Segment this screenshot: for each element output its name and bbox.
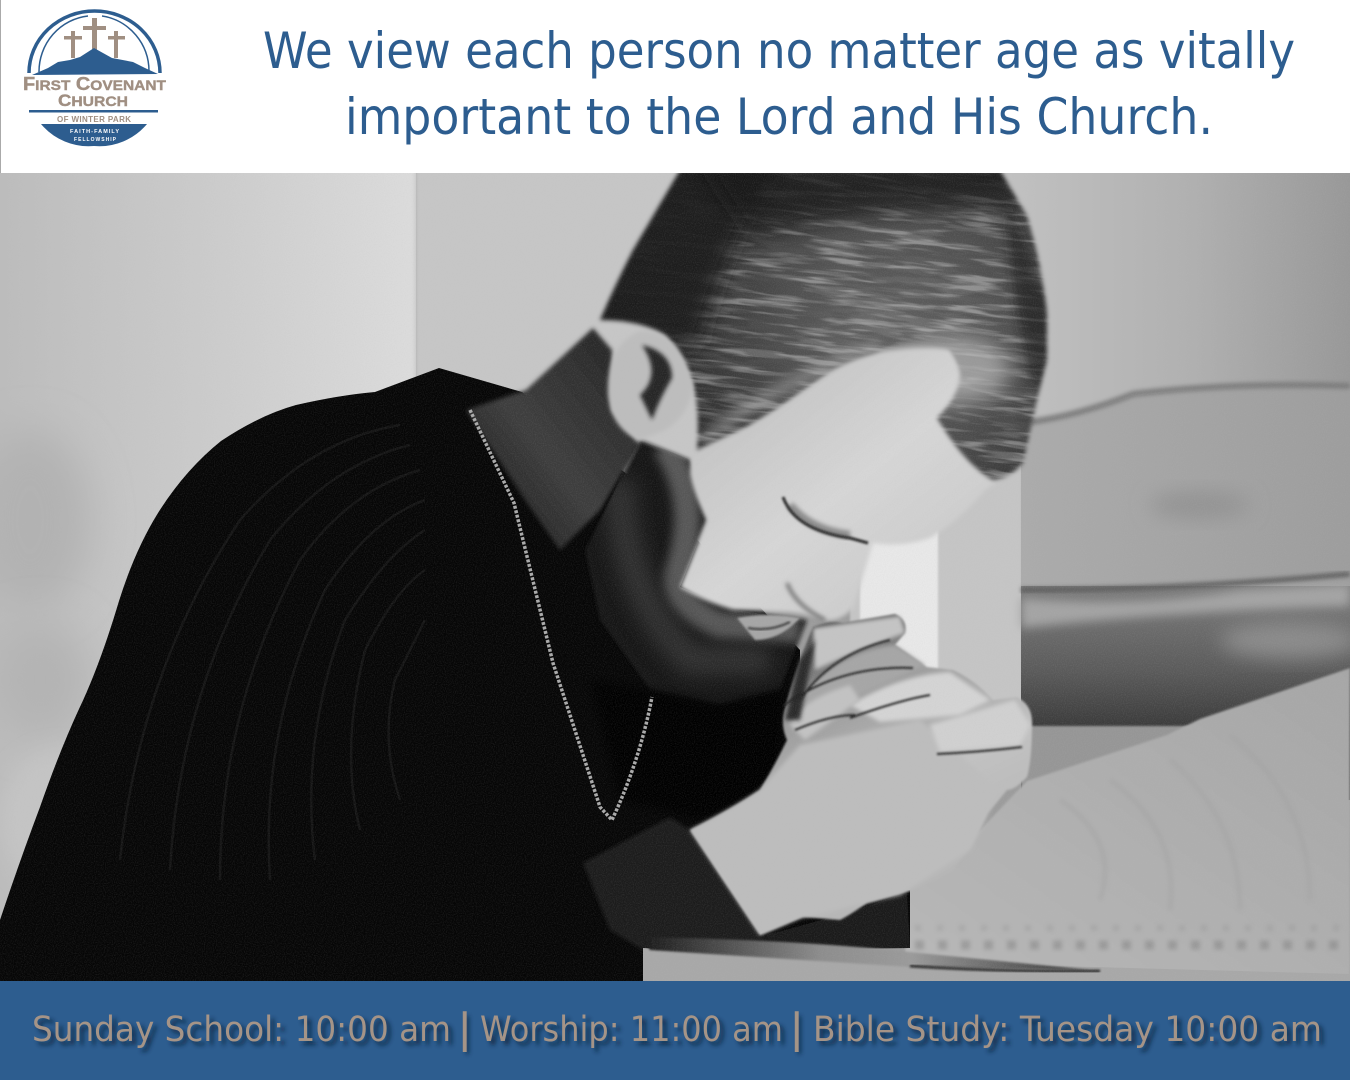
service times: | (790, 1006, 803, 1052)
text shadow (36, 1014, 1326, 1054)
logo subtitle: OF WINTER PARK (57, 115, 131, 124)
beard (587, 438, 810, 702)
service times: Bible Study: Tuesday 10:00 am (813, 1010, 1322, 1050)
logo motto: FAITH-FAMILY (70, 129, 119, 135)
necklace (470, 410, 652, 820)
praying hands (690, 614, 1032, 935)
fingers (802, 644, 925, 706)
text shadow: Worship: 11:00 am (484, 1014, 787, 1054)
wall panel and window (849, 464, 1021, 700)
logo: First Covenant Church: FELLOWSHIP (74, 137, 117, 143)
text shadow: Sunday School: 10:00 am (36, 1014, 455, 1054)
icon: three crosses (64, 18, 125, 58)
footer band (0, 981, 1350, 1080)
sleeve (584, 818, 766, 950)
header background (0, 0, 1350, 173)
wall, middle (414, 173, 700, 472)
service times (32, 1006, 1326, 1054)
service times: Sunday School: 10:00 am (32, 1010, 451, 1050)
face (680, 348, 1022, 620)
ear (608, 331, 693, 440)
icon: mountain (32, 48, 158, 75)
text shadow: Bible Study: Tuesday 10:00 am (817, 1014, 1326, 1054)
closed eye (783, 497, 868, 543)
knit ribs (120, 425, 425, 880)
sweater (0, 368, 910, 981)
logo name line 2: CHURCH (58, 92, 128, 110)
service times: | (458, 1006, 471, 1052)
wall, right (1000, 173, 1270, 420)
bedspread (905, 668, 1350, 981)
open book (643, 938, 1262, 981)
title: important to the Lord and His Church. (345, 88, 1213, 146)
icon: arches (29, 11, 160, 73)
photo grain (0, 173, 1350, 981)
service times: Worship: 11:00 am (480, 1010, 783, 1050)
nose and mouth (737, 583, 825, 640)
title (263, 22, 1295, 146)
logo: First Covenant Church (23, 11, 166, 146)
neck (466, 328, 640, 550)
hair (598, 173, 1050, 483)
headboard (1021, 385, 1350, 800)
logo name line 1: FIRST COVENANT (23, 74, 166, 94)
wall, left (0, 173, 416, 981)
logo banner (41, 124, 147, 146)
